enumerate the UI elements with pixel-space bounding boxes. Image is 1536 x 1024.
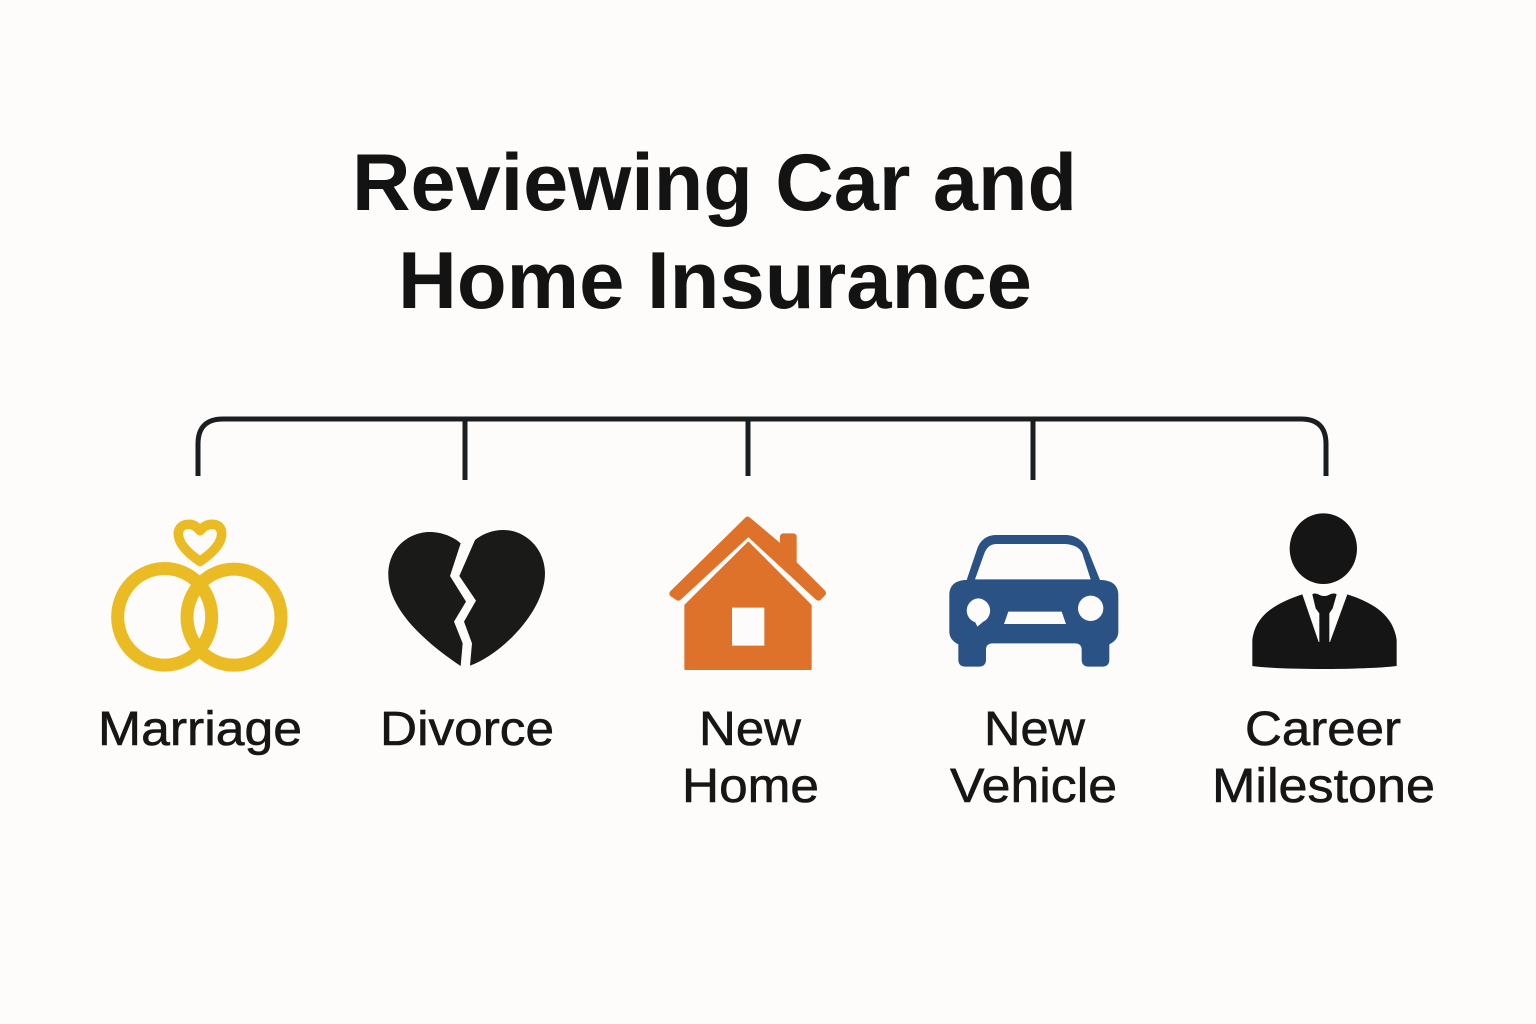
label: New Vehicle — [950, 703, 1117, 813]
connector bracket — [198, 419, 1326, 480]
label: Career Milestone — [1212, 703, 1435, 813]
icon: car — [949, 535, 1118, 667]
label: New Vehicle: Vehicle — [950, 760, 1117, 813]
icon: broken heart — [388, 530, 545, 666]
label: New Home — [682, 703, 819, 813]
label: Marriage: Marriage — [98, 703, 302, 756]
label: New Home: New — [699, 703, 801, 756]
title — [352, 138, 1077, 326]
label: New Vehicle: New — [984, 703, 1085, 756]
label: Career Milestone: Career — [1245, 703, 1401, 756]
title: Home Insurance — [398, 236, 1032, 326]
icon: wedding rings with heart — [118, 524, 281, 665]
title: Reviewing Car and — [352, 138, 1077, 228]
label: Divorce: Divorce — [380, 703, 554, 756]
icon: person in suit — [1252, 513, 1397, 669]
label: New Home: Home — [682, 760, 819, 813]
label: Career Milestone: Milestone — [1212, 760, 1435, 813]
icon: house — [673, 520, 823, 669]
